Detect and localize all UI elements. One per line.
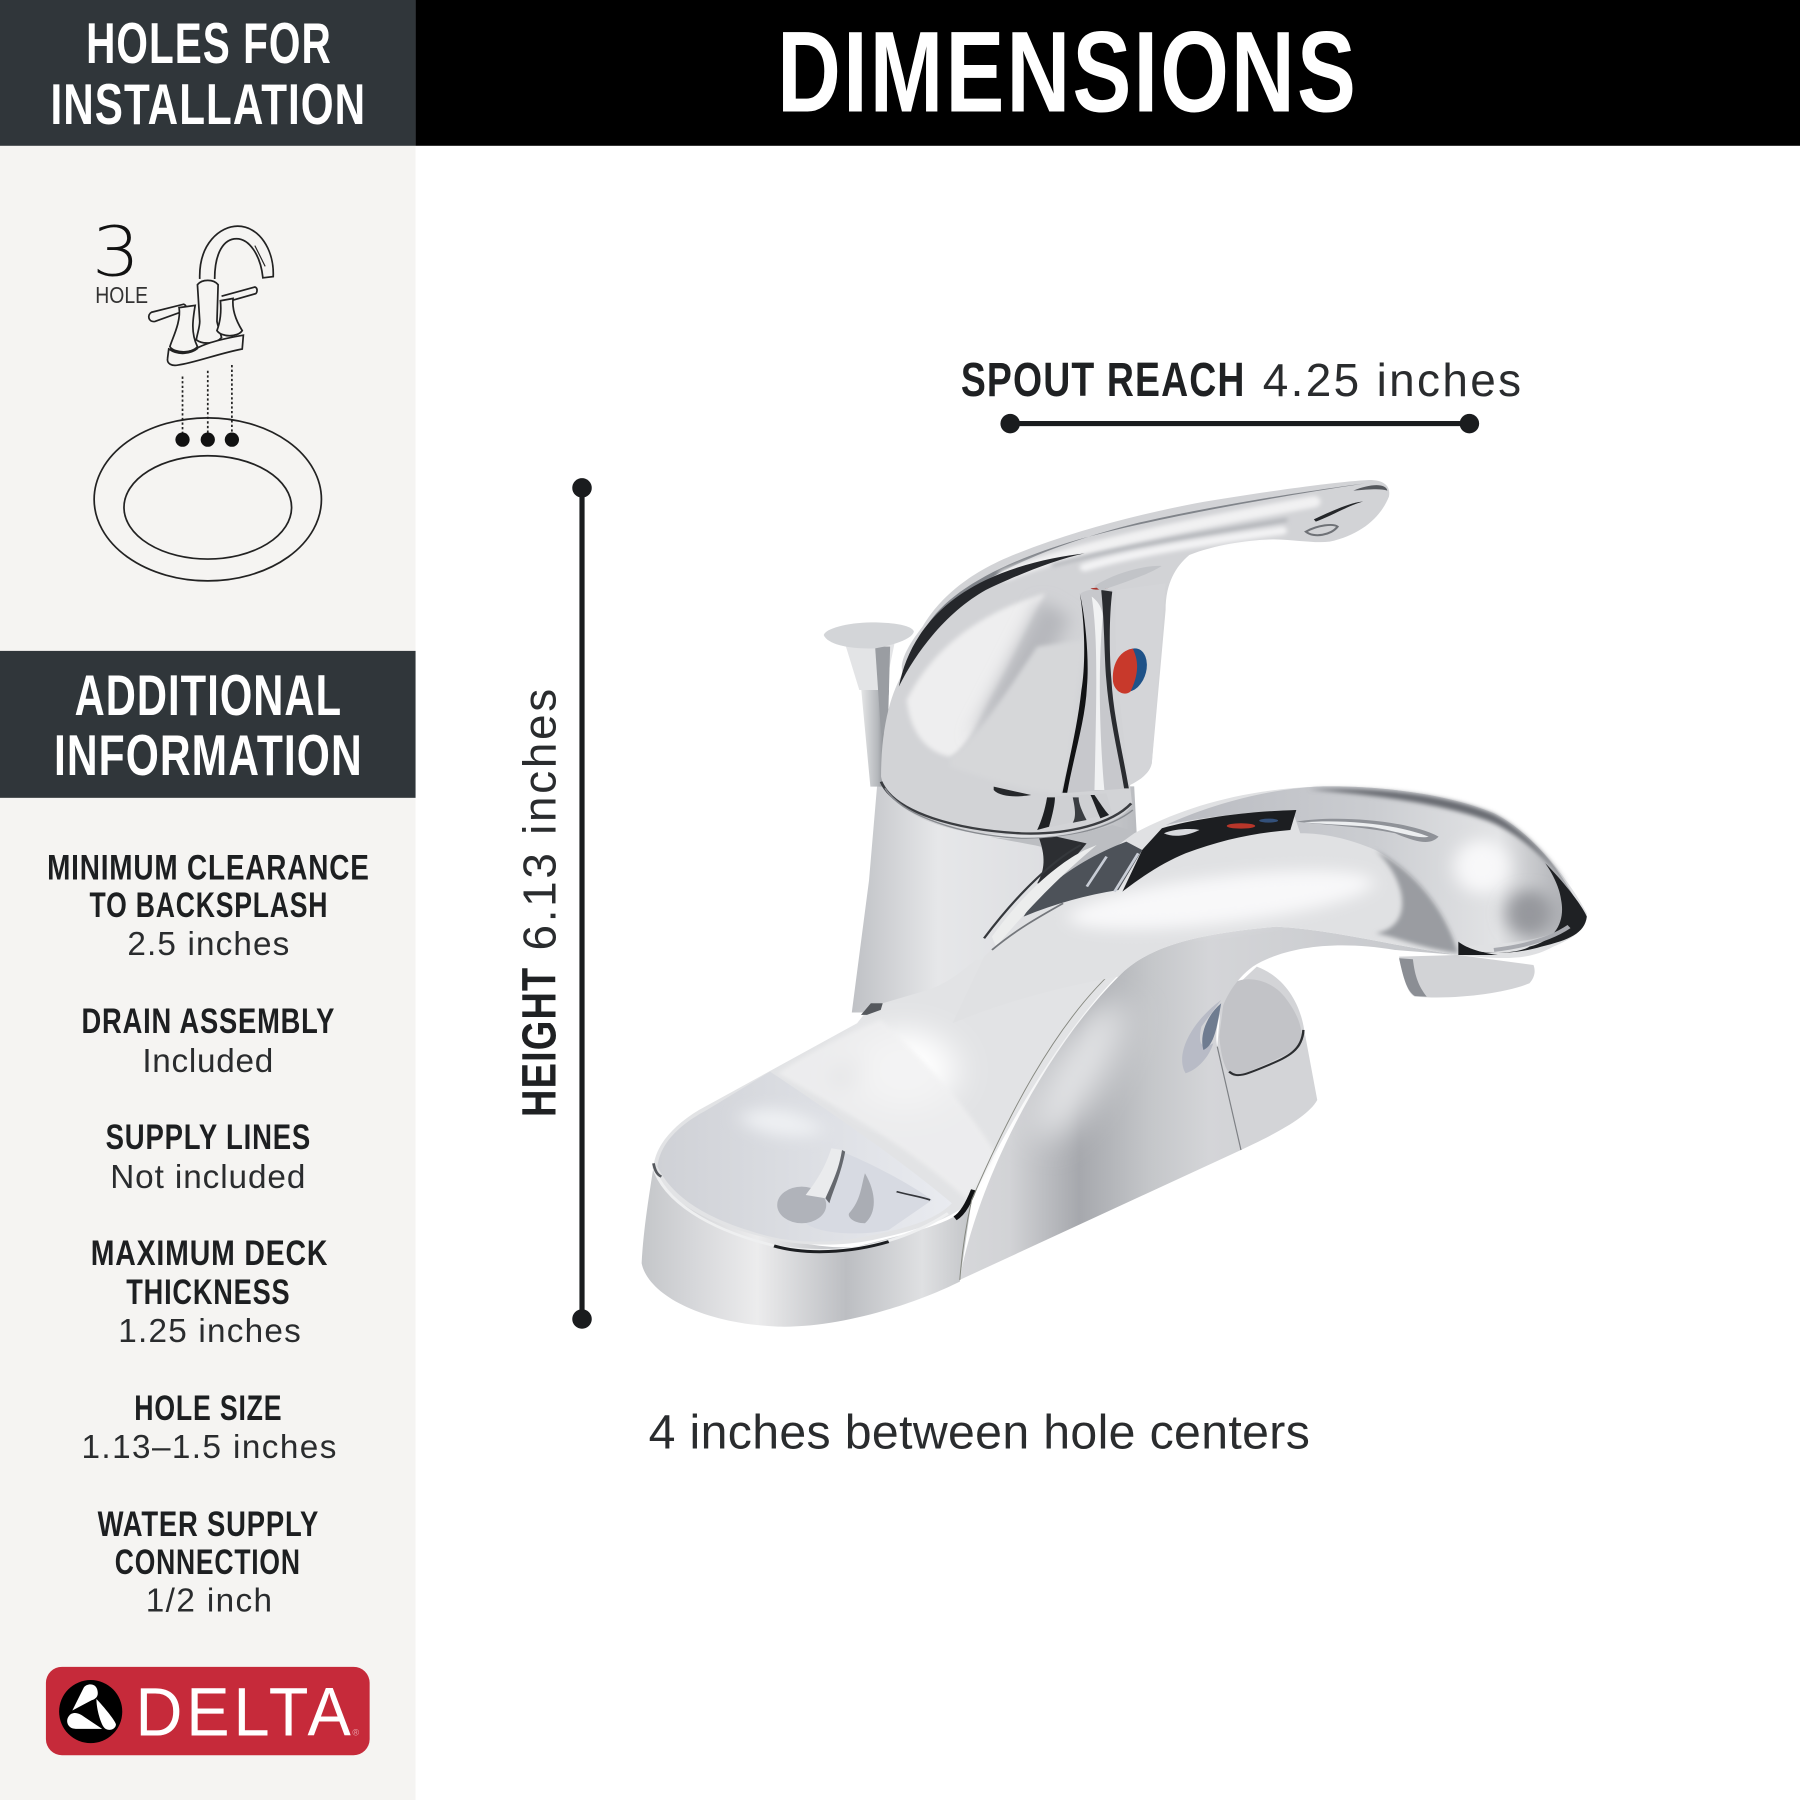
text block: hole centers note: 4 inches between hole centers	[649, 1406, 1310, 1460]
pop-up cone	[845, 642, 895, 690]
text block: minimum clearance: MINIMUM CLEARANCE	[47, 847, 370, 887]
heading bar: dimensions title	[416, 0, 1800, 146]
faucet deck and front base	[642, 953, 1142, 1327]
spout top surface	[1166, 786, 1581, 947]
text block: maximum deck thickness	[91, 1233, 328, 1350]
spout silhouette	[952, 786, 1587, 1023]
hole cover	[806, 1150, 932, 1233]
heading: holes for installation: HOLES FOR	[86, 12, 332, 76]
callout: spout reach	[961, 353, 1521, 433]
heading: additional information: ADDITIONAL	[75, 664, 342, 728]
deck rim	[653, 1167, 948, 1250]
text block: water supply connection: WATER SUPPLY	[98, 1504, 319, 1544]
callout: height	[513, 478, 592, 1329]
spout neck streaks	[1024, 842, 1142, 917]
hot and cold indicator	[1111, 646, 1151, 694]
pop-up rod	[861, 690, 889, 787]
text block: water supply connection: CONNECTION	[115, 1542, 301, 1582]
faucet spout and rear base	[960, 927, 1535, 1280]
text block: maximum deck thickness: MAXIMUM DECK	[91, 1233, 328, 1273]
text block: minimum clearance	[47, 847, 370, 963]
callout: spout reach: SPOUT REACH	[961, 353, 1246, 407]
front skirt	[642, 1167, 972, 1327]
arch seam	[960, 963, 1122, 1280]
handle left dark reflection	[899, 553, 1085, 687]
heading bar: dimensions title: DIMENSIONS	[777, 8, 1358, 136]
spout white glow	[1065, 859, 1378, 941]
callout: height: 6.13 inches	[514, 689, 566, 951]
text block: supply lines: SUPPLY LINES	[106, 1117, 311, 1157]
text block: minimum clearance: 2.5 inches	[127, 926, 289, 963]
deck shadow	[825, 1052, 882, 1095]
text block: supply lines	[106, 1117, 311, 1196]
image: chrome faucet	[642, 480, 1587, 1327]
handle silhouette	[881, 480, 1389, 835]
spout dark band	[1122, 810, 1296, 892]
text block: drain assembly: Included	[142, 1043, 273, 1080]
text block: drain assembly: DRAIN ASSEMBLY	[82, 1001, 335, 1041]
chrome neck	[1037, 793, 1112, 830]
handle left face	[907, 593, 1045, 757]
deck top	[653, 953, 1142, 1245]
heading: holes for installation: INSTALLATION	[51, 73, 366, 137]
logo: delta: ®	[352, 1728, 359, 1738]
rear base riser	[1217, 967, 1317, 1150]
arch body	[960, 927, 1458, 1280]
text block: minimum clearance: TO BACKSPLASH	[90, 885, 328, 925]
text block: drain assembly	[82, 1001, 335, 1080]
text block: maximum deck thickness: THICKNESS	[126, 1272, 290, 1312]
icon: three hole faucet and sink diagram: 3	[92, 213, 140, 293]
aerator	[1399, 955, 1535, 997]
heading: additional information	[0, 651, 416, 798]
deck glow	[853, 1030, 956, 1110]
plate area	[657, 1072, 952, 1242]
text block: hole size	[82, 1388, 336, 1466]
spout tip dark reflection	[1458, 863, 1587, 953]
callout: spout reach: 4.25 inches	[1263, 354, 1521, 406]
faucet handle and pop-up	[824, 480, 1389, 883]
slot at back of deck	[861, 1003, 883, 1015]
panel: left sidebar	[0, 0, 416, 1800]
lever tip highlights	[1314, 502, 1363, 522]
logo: delta: DELTA	[135, 1674, 355, 1751]
text block: hole size: HOLE SIZE	[134, 1388, 282, 1428]
red and blue reflections	[1227, 823, 1255, 829]
text block: water supply connection	[98, 1504, 319, 1620]
icon: three hole faucet and sink diagram: HOLE	[95, 282, 148, 308]
text block: water supply connection: 1/2 inch	[146, 1583, 272, 1620]
faucet column	[852, 786, 1139, 1012]
arch inner highlight	[1182, 1000, 1221, 1073]
spout slit highlight	[1296, 819, 1439, 842]
heading: additional information: INFORMATION	[54, 724, 363, 788]
lever shading	[926, 483, 1365, 627]
icon: three hole faucet and sink diagram	[92, 213, 321, 581]
text block: hole size: 1.13–1.5 inches	[82, 1429, 336, 1466]
heading: holes for installation	[0, 0, 416, 146]
text block: supply lines: Not included	[110, 1159, 305, 1196]
text block: maximum deck thickness: 1.25 inches	[118, 1313, 301, 1350]
spout side shadow	[1375, 850, 1458, 953]
handle right face light	[1115, 583, 1166, 785]
logo: delta	[46, 1667, 370, 1755]
callout: height: HEIGHT	[513, 967, 567, 1117]
handle collar	[881, 782, 1131, 834]
handle center streak	[1061, 589, 1128, 793]
faucet spout upper	[952, 786, 1587, 1023]
pop-up knob	[824, 622, 914, 648]
